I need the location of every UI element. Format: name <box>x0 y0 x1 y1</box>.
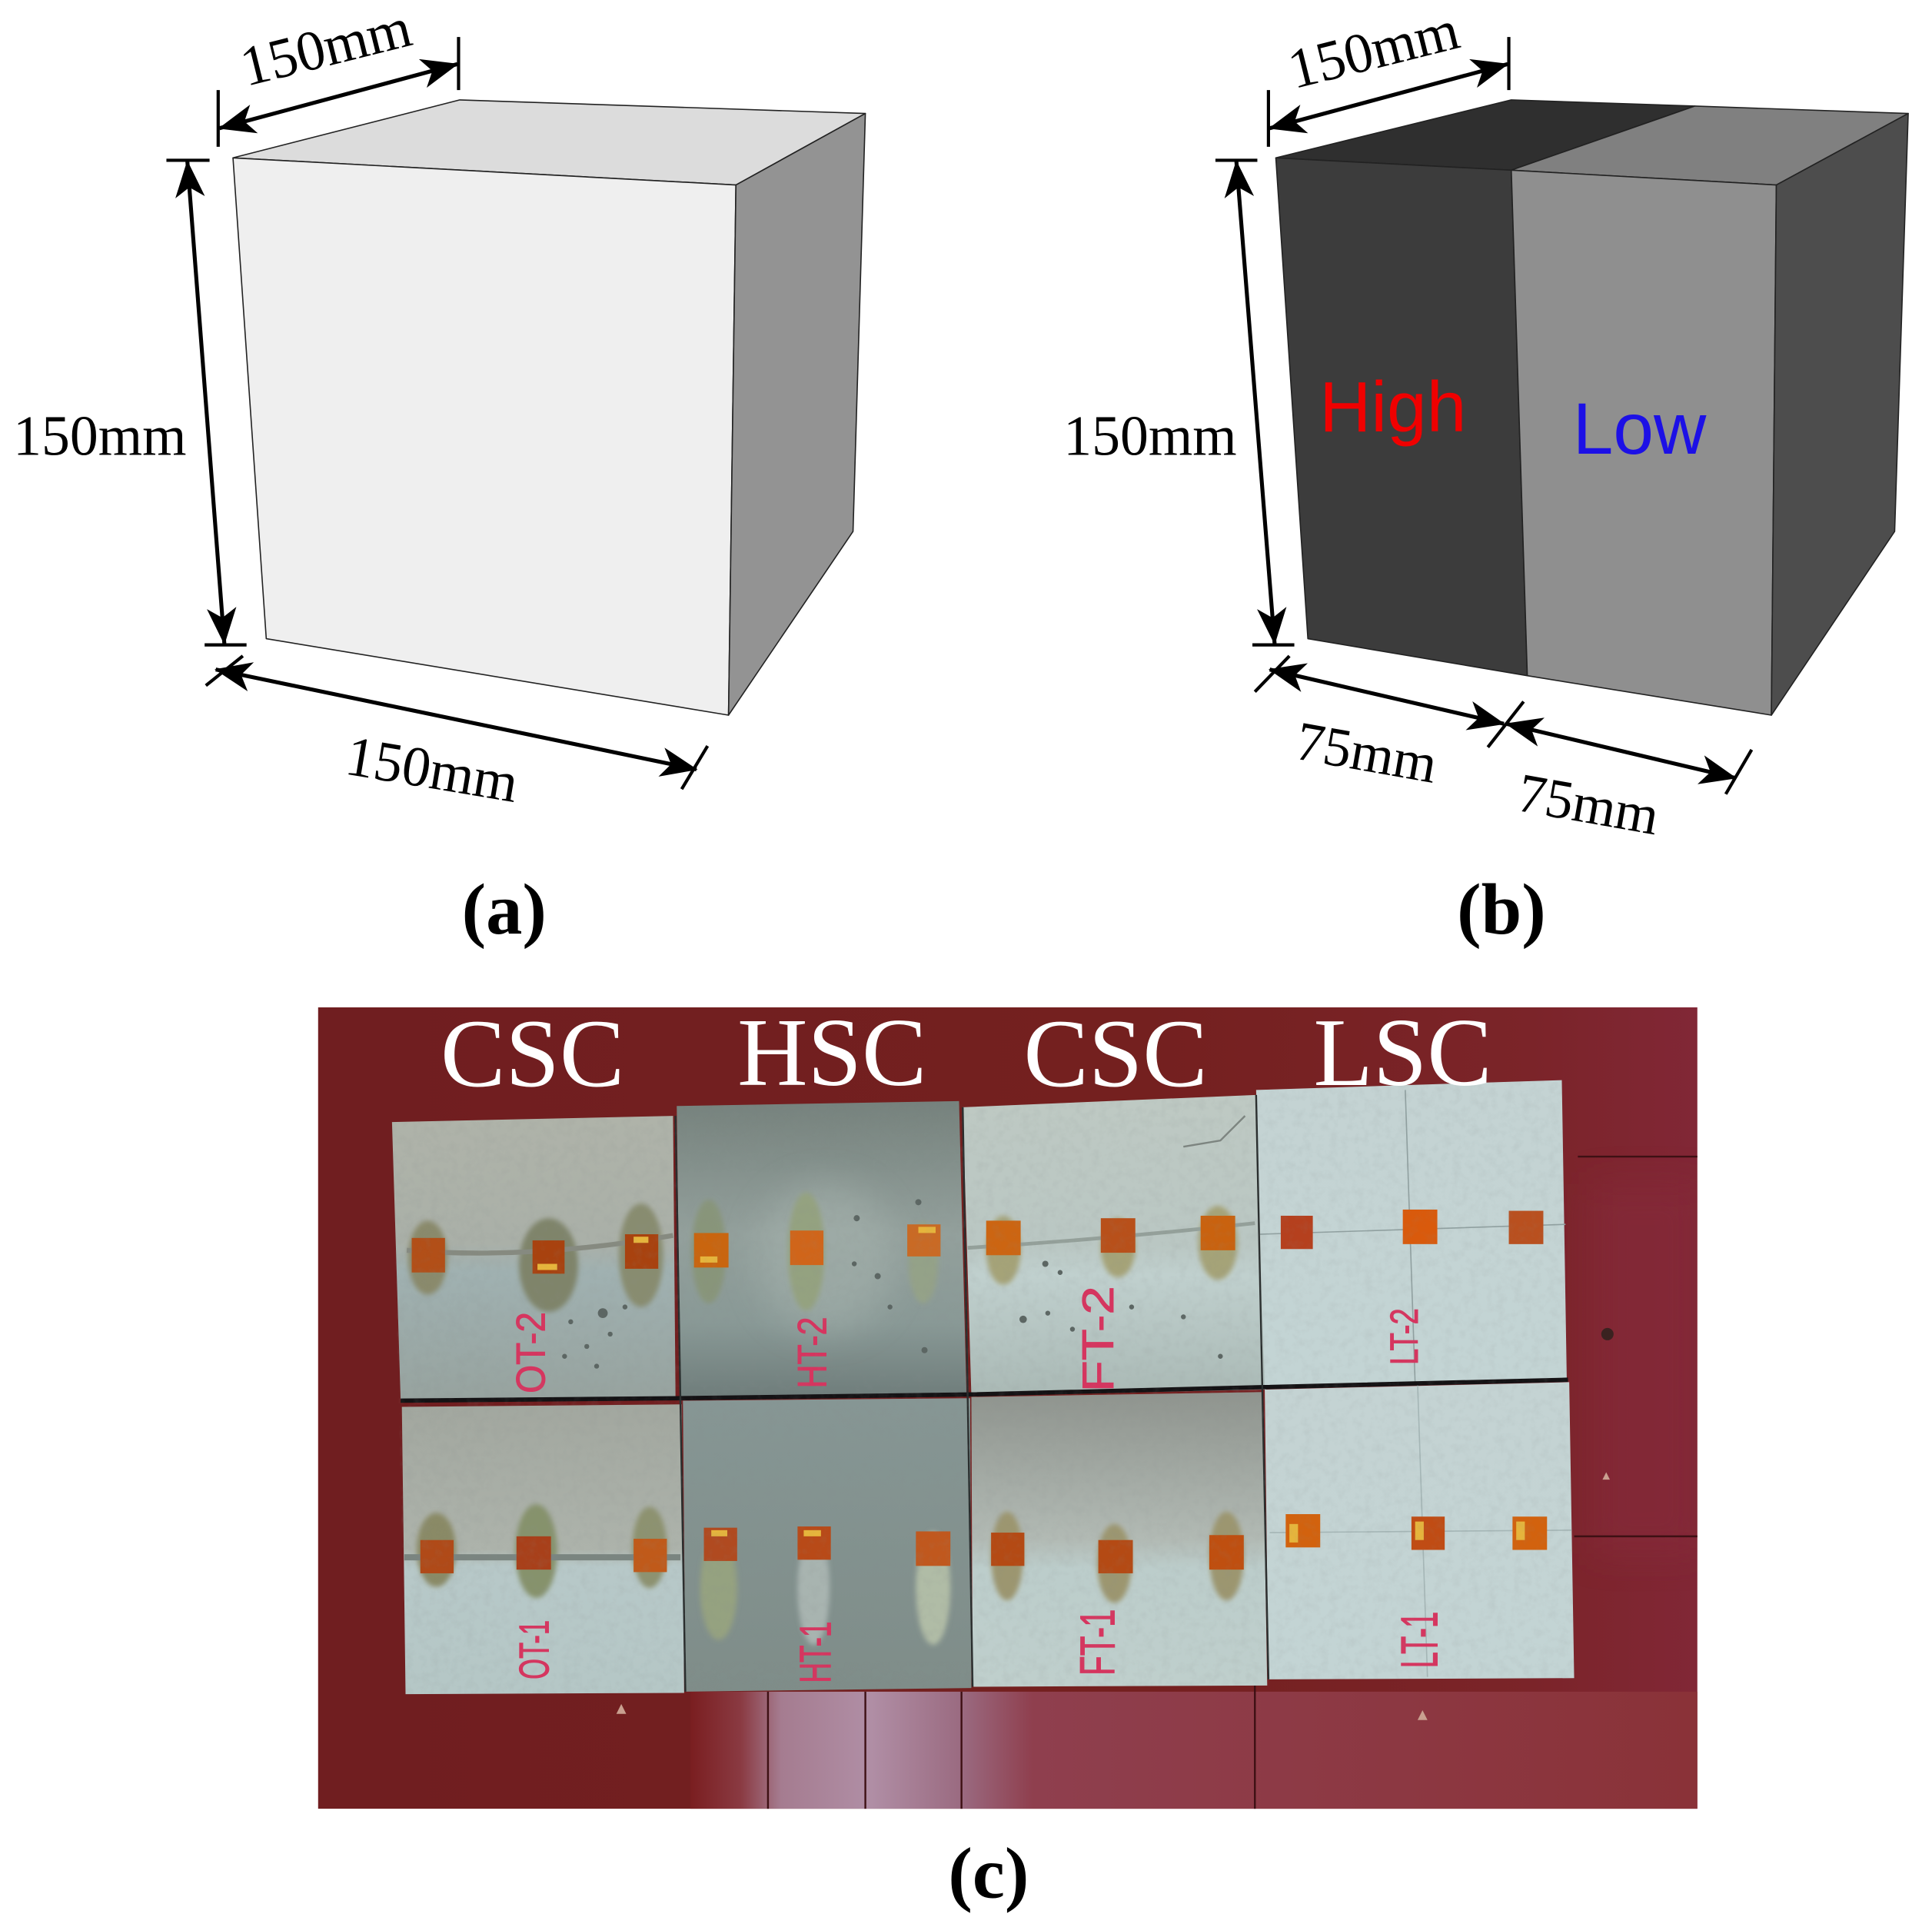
floor background <box>318 1007 1701 1809</box>
specimen HT-2 <box>677 1101 966 1397</box>
bottom dimension b <box>1255 656 1751 847</box>
group labels: LSC <box>1314 999 1492 1107</box>
specimen HT-1: HT-1 <box>792 1621 841 1683</box>
specimen HT-1 <box>683 1398 971 1692</box>
cube a <box>233 100 866 715</box>
pits <box>1019 1261 1223 1359</box>
group labels: CSC <box>441 1000 624 1108</box>
specimen gaps <box>401 1095 1568 1692</box>
specimen LT-1 <box>1265 1382 1575 1679</box>
specimen OT-2 <box>392 1116 676 1400</box>
specimen OT-2: OT-2 <box>509 1312 554 1393</box>
specimen FT-2 <box>963 1095 1266 1396</box>
left dimension b: 150mm <box>1063 404 1237 468</box>
specimen LT-1: LT-1 <box>1392 1612 1449 1668</box>
group labels: HSC <box>737 999 926 1107</box>
pits <box>852 1199 928 1353</box>
bottom dimension a <box>206 656 707 814</box>
specimen LT-2: LT-2 <box>1382 1308 1426 1365</box>
specimen FT-1 <box>971 1392 1267 1686</box>
panel b: two-part cube <box>1063 0 1908 950</box>
bottom dimension b: 75mm <box>1513 761 1664 847</box>
specimen OT-1 <box>402 1404 684 1694</box>
concrete mottling <box>397 1102 1565 1599</box>
specimen FT-2: FT-2 <box>1074 1286 1123 1392</box>
caption c: (c) <box>948 1834 1029 1914</box>
pits <box>562 1304 627 1369</box>
left dimension b <box>1063 160 1295 645</box>
group labels <box>444 1020 1487 1087</box>
label high: High <box>1319 367 1466 447</box>
caption b: (b) <box>1457 870 1546 950</box>
left dimension a <box>13 160 247 645</box>
group labels: CSC <box>1023 1000 1208 1108</box>
specimen HT-2: HT-2 <box>790 1317 835 1388</box>
top dimension a <box>218 0 458 147</box>
panel c: photograph of specimens <box>318 999 1701 1809</box>
panel a: plain cube <box>13 0 866 950</box>
bottom dimension a: 150mm <box>341 724 523 814</box>
specimen FT-1: FT-1 <box>1069 1609 1125 1676</box>
top dimension b <box>1269 0 1509 147</box>
caption a: (a) <box>462 870 547 950</box>
specimen OT-1: OT-1 <box>511 1620 558 1679</box>
label low: Low <box>1573 388 1707 470</box>
bottom dimension b: 75mm <box>1292 710 1442 795</box>
left dimension a: 150mm <box>13 404 187 468</box>
specimen LT-2 <box>1256 1080 1567 1386</box>
top dimension b: 150mm <box>1282 0 1465 101</box>
cube b <box>1276 100 1908 715</box>
